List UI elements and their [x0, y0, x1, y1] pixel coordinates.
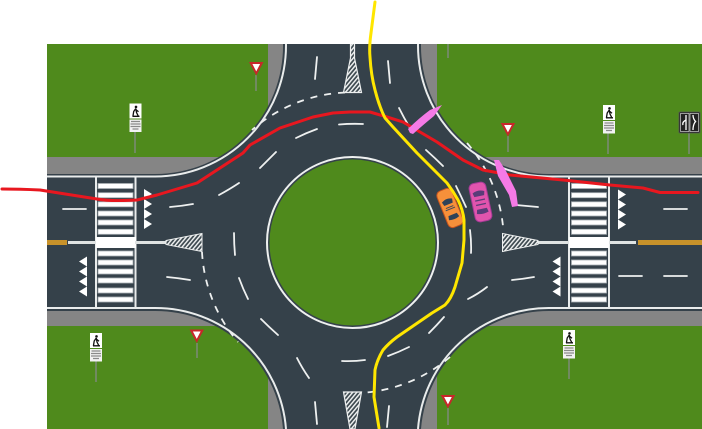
- central island: [267, 157, 438, 328]
- pedestrian sign bottom right: [563, 330, 575, 358]
- right splitter island: [502, 234, 538, 252]
- dashed yield lines: [202, 92, 504, 393]
- pedestrian sign top right: [603, 105, 615, 134]
- lane dashes: [63, 57, 687, 427]
- yellow vehicle path: [370, 2, 464, 428]
- top splitter island: [344, 44, 362, 92]
- yield sign bottom left: [190, 330, 204, 343]
- orange car: [436, 188, 462, 228]
- yield sign top left: [249, 62, 264, 76]
- left splitter island: [166, 234, 202, 252]
- yield shark teeth: [79, 189, 626, 296]
- double yellow centre lines: [47, 240, 702, 245]
- pedestrian sign bottom left: [90, 333, 102, 362]
- white median lines: [68, 241, 636, 244]
- pink crossing mark upper: [408, 105, 442, 134]
- pedestrian sign top left: [130, 104, 142, 132]
- pink car: [468, 181, 493, 223]
- red vehicle path: [2, 112, 698, 201]
- yield sign top right: [501, 123, 515, 136]
- bottom splitter island: [344, 392, 362, 429]
- right crosswalk: [569, 176, 609, 308]
- roundabout lane sign: [679, 112, 700, 133]
- sign posts: [96, 44, 689, 425]
- pink crossing mark right: [494, 160, 518, 207]
- yield sign bottom right: [441, 395, 455, 408]
- left crosswalk: [96, 176, 136, 308]
